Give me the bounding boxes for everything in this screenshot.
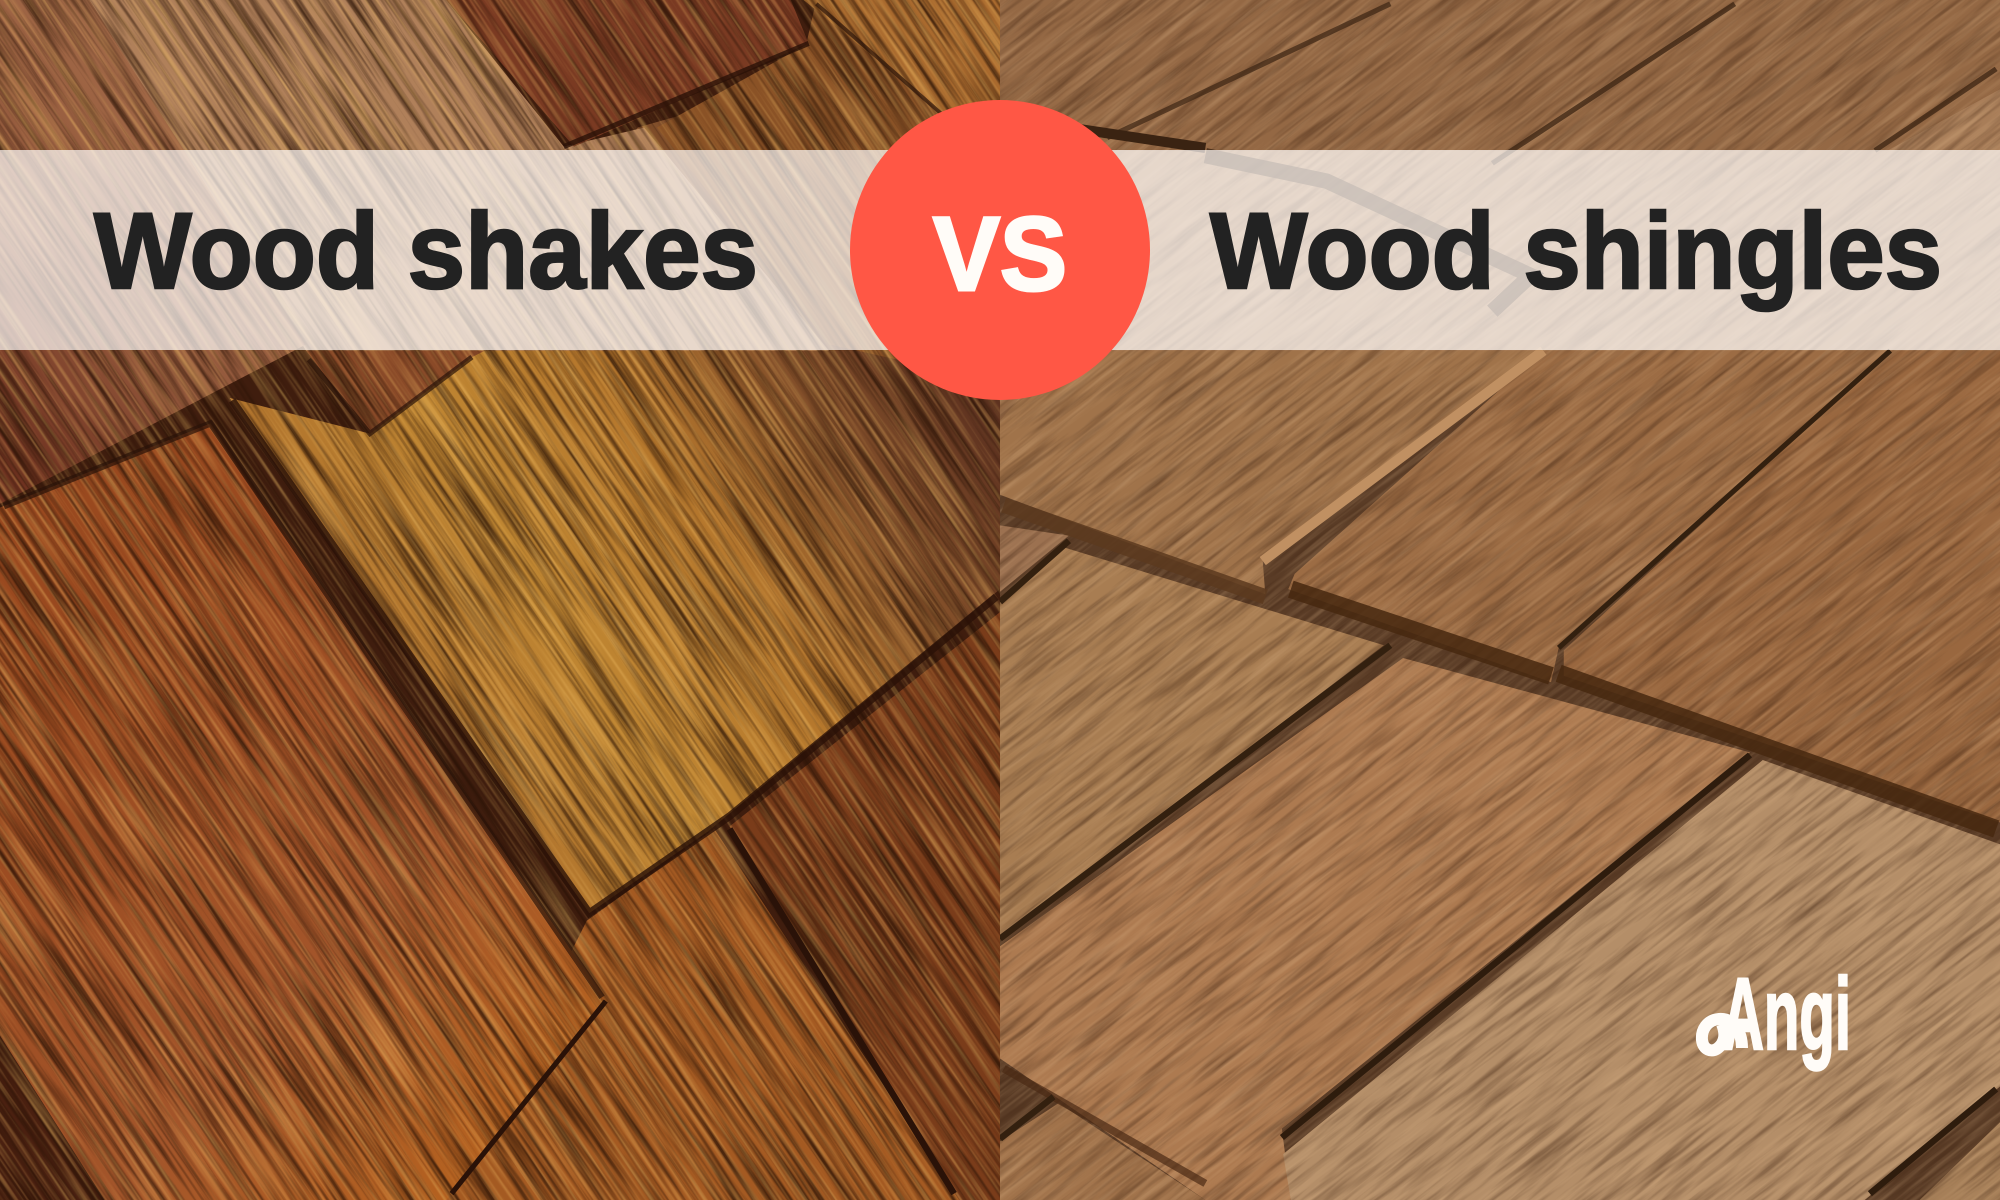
shingle: row two left	[1000, 546, 1384, 937]
shake tile: bottom centre	[446, 829, 959, 1200]
shingle row: top	[1000, 0, 2000, 421]
shake tile: corner	[0, 1058, 102, 1200]
shingle: bottom right corner	[1920, 1122, 2000, 1200]
right photo: wood shingles	[1000, 0, 2000, 1200]
tile shadow lines left	[4, 4, 996, 1194]
shingle: small left	[1000, 525, 1069, 592]
shake tile: bottom right	[730, 612, 1000, 1200]
heading: wood shakes: Wood shakes	[94, 190, 758, 311]
shingle: row one right	[1564, 351, 2000, 823]
logo: Angi: Angi	[1722, 957, 1851, 1071]
shingle: row one left	[1000, 351, 1543, 594]
shingle butt edges	[1000, 4, 1996, 1194]
shake tile: lower tip under banner	[306, 351, 485, 434]
shingle: row two centre	[1000, 658, 1750, 1200]
wood grain right	[1000, 0, 2000, 1200]
shake tile: large lower left	[0, 423, 606, 1200]
pale grain right	[1000, 0, 2000, 1200]
shingle: banner band area	[1084, 89, 2000, 351]
left photo: wood shakes	[0, 0, 1000, 1200]
shake tile: top right	[657, 0, 1000, 383]
wood grain left	[0, 0, 1000, 1200]
shingle: row one centre	[1288, 351, 1890, 682]
shake tile: top centre	[89, 0, 829, 351]
heading: wood shingles: Wood shingles	[1210, 190, 1942, 311]
logo: Angi	[1702, 957, 1851, 1071]
title banner	[0, 150, 2000, 350]
shake tile: top left	[0, 0, 306, 504]
shingle: row two right	[1283, 760, 2000, 1200]
shake tile: top right orange	[804, 0, 1000, 112]
shake tile: top dark	[446, 0, 809, 147]
shake tile: centre golden	[230, 77, 1000, 913]
vs badge: VS	[933, 196, 1067, 313]
vs badge	[850, 100, 1150, 400]
shingle: bottom left	[1000, 1103, 1205, 1200]
highlight grain left	[0, 0, 1000, 1200]
